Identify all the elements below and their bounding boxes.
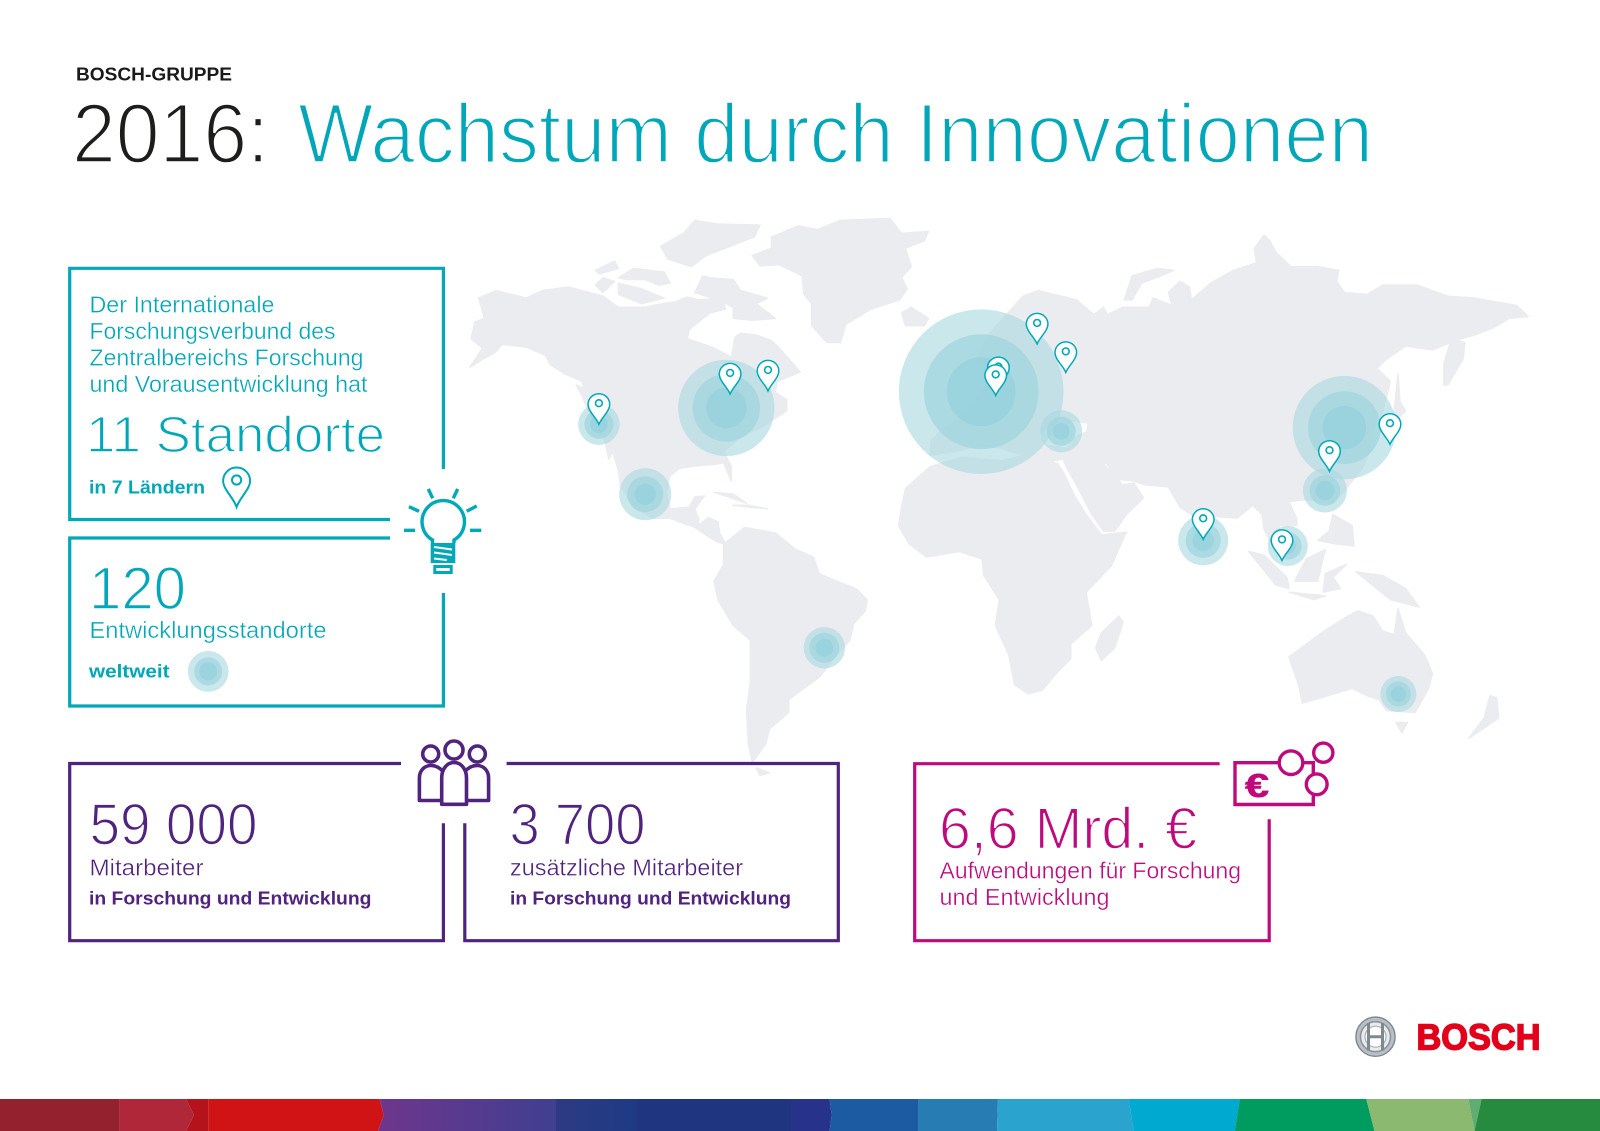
description: Aufwendungen für Forschung bbox=[940, 857, 1241, 883]
key figure: 3 700 bbox=[510, 792, 646, 857]
site bubble: India bbox=[1178, 515, 1228, 565]
label: Entwicklungsstandorte bbox=[90, 617, 326, 643]
intro text: und Vorausentwicklung hat bbox=[90, 371, 368, 397]
euro sign: € bbox=[1245, 767, 1269, 804]
Bosch logo bbox=[1356, 1017, 1540, 1058]
panel frame bbox=[70, 538, 443, 706]
panel: 6,6 Mrd. Euro bbox=[915, 764, 1269, 941]
panel: 3 700 zusaetzliche Mitarbeiter bbox=[465, 764, 838, 941]
key figure: 120 bbox=[89, 555, 186, 622]
pin: Germany, rear bbox=[988, 357, 1009, 388]
intro text: Der Internationale bbox=[90, 291, 274, 317]
site bubble: Brazil bbox=[804, 627, 845, 668]
panel frame bbox=[465, 764, 838, 941]
site bubble: South China bbox=[1303, 468, 1347, 512]
inland seas bbox=[1040, 422, 1087, 448]
site bubble: North America bbox=[678, 360, 774, 456]
pin: India bbox=[1192, 509, 1214, 539]
title: 2016: bbox=[72, 86, 269, 180]
site bubble: Mexico bbox=[619, 468, 671, 520]
pin: Russia, north bbox=[1026, 313, 1048, 344]
pin: Boston bbox=[757, 360, 779, 391]
pin: Germany, front bbox=[985, 365, 1006, 395]
panel: 120 Entwicklungsstandorte bbox=[70, 538, 443, 706]
site bubble: Europe bbox=[899, 309, 1064, 474]
site bubble: Turkey bbox=[1040, 410, 1082, 452]
landmass: Eurasia, Africa and Australia bbox=[899, 235, 1528, 738]
icon: light bulb bbox=[404, 489, 481, 572]
label: zusätzliche Mitarbeiter bbox=[510, 854, 743, 880]
sub label: in 7 Ländern bbox=[89, 476, 205, 497]
key figure: 6,6 Mrd. € bbox=[939, 796, 1197, 861]
pin: Russia, east bbox=[1055, 342, 1077, 372]
wordmark: BOSCH bbox=[1416, 1017, 1540, 1058]
key figure: 59 000 bbox=[90, 792, 258, 857]
pin: Chicago bbox=[719, 363, 741, 394]
landmass: the Americas, Greenland and Arctic islands bbox=[470, 218, 928, 775]
intro text: Zentralbereichs Forschung bbox=[90, 345, 364, 371]
description bbox=[940, 857, 1241, 910]
site bubble: China bbox=[1293, 376, 1396, 479]
logo armature ring bbox=[1356, 1017, 1395, 1056]
key figure: 11 Standorte bbox=[86, 406, 385, 463]
title: Wachstum durch Innovationen bbox=[298, 86, 1373, 180]
pin: California bbox=[588, 394, 610, 424]
icon: site bubble bbox=[188, 651, 229, 692]
icon: banknote and coins bbox=[1235, 743, 1333, 804]
intro text bbox=[90, 291, 368, 397]
description: und Entwicklung bbox=[940, 884, 1110, 910]
site bubble: Singapore bbox=[1268, 526, 1308, 566]
site bubble: California bbox=[578, 404, 620, 445]
panel frame bbox=[915, 764, 1269, 941]
icon: location pin bbox=[223, 468, 250, 507]
panel frame bbox=[70, 268, 443, 520]
panel: 11 Standorte bbox=[70, 268, 443, 520]
panel: 59 000 Mitarbeiter bbox=[70, 764, 443, 941]
panel frame bbox=[70, 764, 443, 941]
sub label: in Forschung und Entwicklung bbox=[510, 887, 791, 908]
intro text: Forschungsverbund des bbox=[90, 318, 336, 344]
world map bbox=[470, 218, 1528, 775]
pin: China bbox=[1319, 441, 1340, 471]
footer colour band bbox=[0, 1099, 1600, 1131]
sub label: in Forschung und Entwicklung bbox=[89, 887, 371, 908]
label: Mitarbeiter bbox=[90, 854, 204, 880]
pin: Japan bbox=[1379, 414, 1401, 444]
pin: Singapore bbox=[1271, 530, 1293, 560]
kicker: Bosch-Gruppe: BOSCH-GRUPPE bbox=[76, 64, 232, 84]
site bubble: Australia bbox=[1380, 676, 1416, 712]
sub label: weltweit bbox=[88, 661, 170, 682]
icon: group of people bbox=[419, 741, 489, 804]
